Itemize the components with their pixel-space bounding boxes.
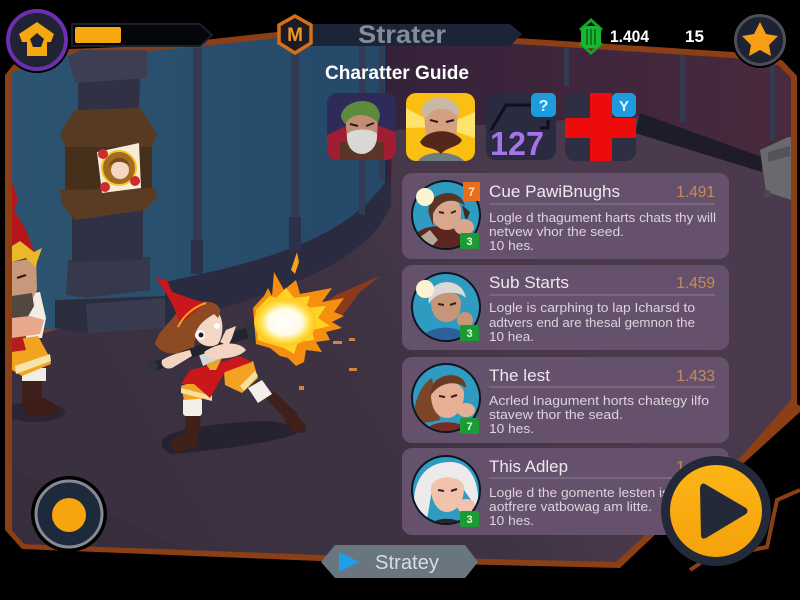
socks: [22, 368, 46, 381]
icon: M badge: M: [287, 25, 303, 46]
legs: [184, 415, 201, 440]
name: Sub Starts: [489, 273, 569, 292]
rank badge: 7: [468, 185, 475, 199]
level badge: 7: [466, 421, 473, 433]
heading: Charatter Guide: [325, 62, 469, 84]
muzzle flash: [253, 252, 380, 390]
top bar: title plate: Strater: [358, 21, 446, 49]
description: 10 hea.: [489, 329, 534, 344]
left character: arms-crossed man: [12, 182, 58, 416]
description: stavew thor the sead.: [489, 407, 623, 422]
icon: play triangle: [700, 484, 748, 539]
red skirt: [181, 356, 252, 398]
hair back: [155, 310, 196, 354]
card 2: [402, 265, 729, 350]
description: [489, 210, 716, 253]
description: 10 hes.: [489, 238, 534, 253]
score: 1.439: [676, 459, 715, 476]
score: 1.433: [676, 368, 715, 385]
description: [489, 300, 695, 344]
back wall: blue section: [0, 30, 392, 330]
face: [12, 258, 37, 304]
lower right frame strip: [690, 490, 800, 570]
portrait: [411, 455, 481, 530]
level badge: 3: [466, 514, 473, 526]
card 1: [402, 173, 729, 259]
description: adtvers end are thesal gemnon the: [489, 315, 695, 330]
card 4: [402, 448, 729, 535]
boots: [22, 378, 42, 402]
description: 10 hes.: [489, 421, 534, 436]
thumbnail: red cross: [565, 93, 636, 161]
currency value: 1.404: [610, 27, 649, 46]
hair: [178, 302, 220, 348]
description: Logle is carphing to lap Icharsd to: [489, 300, 695, 315]
name: Cue PawiBnughs: [489, 182, 620, 201]
icon: cross: [565, 93, 636, 161]
top bar: title plate: [279, 16, 522, 53]
portrait: [411, 180, 481, 252]
thumbnail: green-haired veteran: [327, 93, 396, 160]
beard: [12, 293, 34, 322]
description: [489, 393, 709, 436]
red hat: [155, 278, 206, 324]
description: [489, 485, 670, 528]
description: Acrled Inagument horts chategy ilfo: [489, 393, 709, 408]
card 3: [402, 357, 729, 443]
description: netvew vhor the seed.: [489, 224, 624, 239]
icon: M badge: [279, 16, 311, 53]
sash: [12, 335, 26, 352]
badge: Y: [619, 98, 629, 115]
portrait: [411, 272, 481, 345]
counter value: 15: [685, 27, 704, 46]
wall poles: [191, 45, 775, 274]
back wall: maroon section: [385, 44, 791, 190]
strategy tab: Stratey: [375, 552, 439, 574]
shorts: [181, 376, 212, 400]
crossed arms: [12, 316, 44, 338]
trolley: [760, 137, 792, 200]
level badge: 3: [466, 328, 473, 340]
description: 10 hes.: [489, 513, 534, 528]
icon: star: [742, 22, 778, 56]
thumbnail: mustached man: [406, 93, 475, 161]
score: 1.459: [676, 275, 715, 292]
head: [193, 309, 222, 346]
hero girl with cannon: [148, 278, 306, 454]
name: This Adlep: [489, 457, 568, 476]
top bar: progress meter: [72, 24, 212, 46]
top bar: home button: [4, 7, 70, 73]
curved ledge: [165, 175, 391, 325]
description: Logle d thagument harts chats thy will: [489, 210, 716, 225]
cannon: [148, 326, 254, 372]
left shadow on floor: [12, 403, 65, 422]
description: Logle d the gomente lesten is: [489, 485, 670, 500]
currency: green gem: [580, 20, 602, 53]
pillar with poster: [55, 50, 166, 333]
floor: [12, 116, 791, 562]
boots: [171, 434, 198, 453]
thumbnail: score card 127: 127: [490, 125, 544, 162]
star button: [732, 12, 788, 68]
strategy tab: [321, 545, 478, 578]
level badge: 3: [466, 236, 473, 248]
hat: [12, 182, 36, 262]
shirt: [26, 292, 46, 338]
thumbnail: score card 127: [486, 93, 556, 162]
score: 1.491: [676, 184, 715, 201]
icon: house: [19, 22, 54, 56]
arms: [162, 350, 192, 369]
torso: [198, 348, 222, 366]
icon: blue arrow: [339, 552, 359, 572]
description: aotfrere vatbowag am litte.: [489, 499, 652, 514]
badge: ?: [539, 98, 548, 115]
blond hair: [12, 241, 42, 268]
play button: [661, 456, 771, 566]
dark right ledge: [635, 113, 762, 172]
shorts: [12, 336, 51, 376]
poster on pillar: [97, 143, 141, 193]
joystick: [31, 476, 107, 552]
name: The lest: [489, 366, 550, 385]
portrait: [411, 363, 481, 435]
ground shadow: [162, 421, 297, 454]
